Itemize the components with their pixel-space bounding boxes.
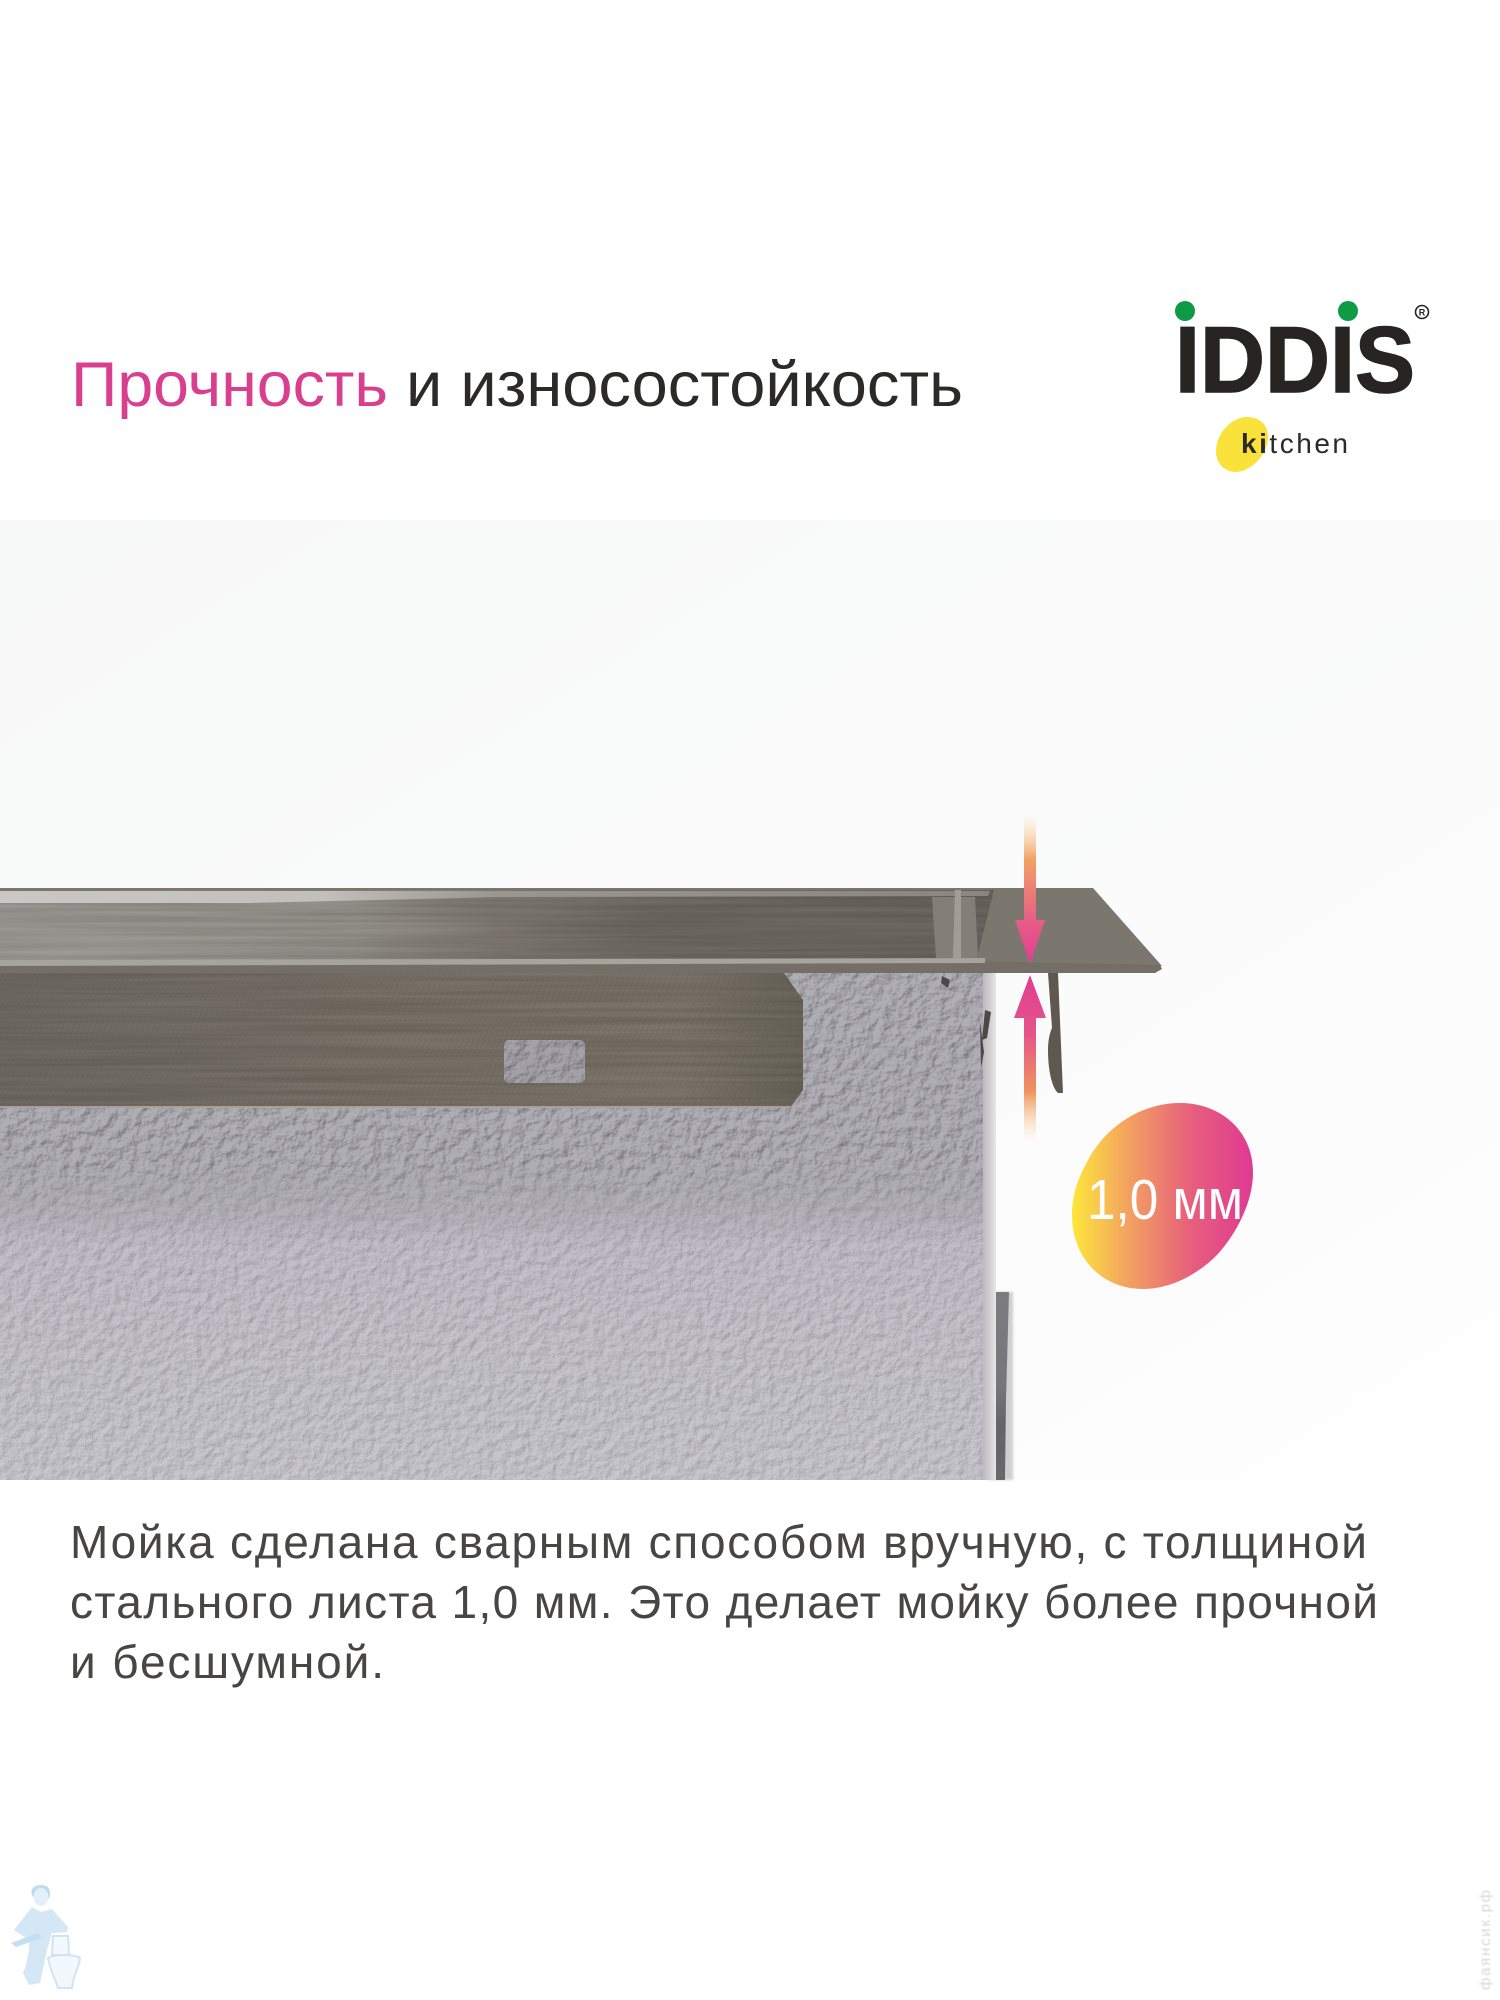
bottom leg of sink	[988, 1292, 1013, 1480]
title: Прочность	[71, 350, 388, 420]
badge blob	[1072, 1103, 1253, 1289]
arrow: top thickness arrow	[1015, 814, 1045, 964]
body text: стального листа 1,0 мм. Это делает мойку более прочной	[70, 1576, 1378, 1628]
toilet	[48, 1936, 80, 1988]
foam dents	[941, 976, 991, 1068]
mounting bracket	[0, 973, 803, 1108]
title: и износостойкость	[406, 350, 963, 420]
callout: 1,0 mm thickness badge	[1072, 1103, 1253, 1289]
logo green dots	[1175, 301, 1358, 321]
logo yellow blob	[1216, 417, 1268, 472]
logo kitchen word: kitchen	[1241, 428, 1348, 459]
title	[71, 350, 963, 420]
body text	[70, 1516, 1378, 1688]
bowl upper highlight band	[0, 891, 990, 903]
watermark text: фаянсик.рф	[1477, 1890, 1494, 1990]
product photo panel	[0, 888, 1162, 1481]
badge text: 1,0 мм	[1087, 1168, 1243, 1232]
logo: iddis kitchen	[1175, 301, 1428, 472]
bracket square hole	[504, 1040, 585, 1083]
registered mark	[1416, 306, 1428, 318]
foam sound insulation body	[0, 965, 996, 1480]
plumber figure	[11, 1885, 68, 1985]
photo background	[0, 520, 1500, 1480]
icon: plumber watermark	[11, 1885, 80, 1988]
registered mark: R	[1419, 308, 1426, 318]
front rim of flange	[0, 958, 1162, 973]
body text: и бесшумной.	[70, 1636, 384, 1688]
logo wordmark: IDDIS	[1175, 307, 1415, 412]
arrow: bottom thickness arrow	[1014, 975, 1046, 1142]
bowl right corner	[932, 889, 978, 958]
body text: Мойка сделана сварным способом вручную, с толщиной	[70, 1516, 1367, 1568]
flange top surface	[0, 888, 1162, 968]
sink bowl interior	[0, 888, 1000, 962]
side clip	[1048, 973, 1063, 1093]
